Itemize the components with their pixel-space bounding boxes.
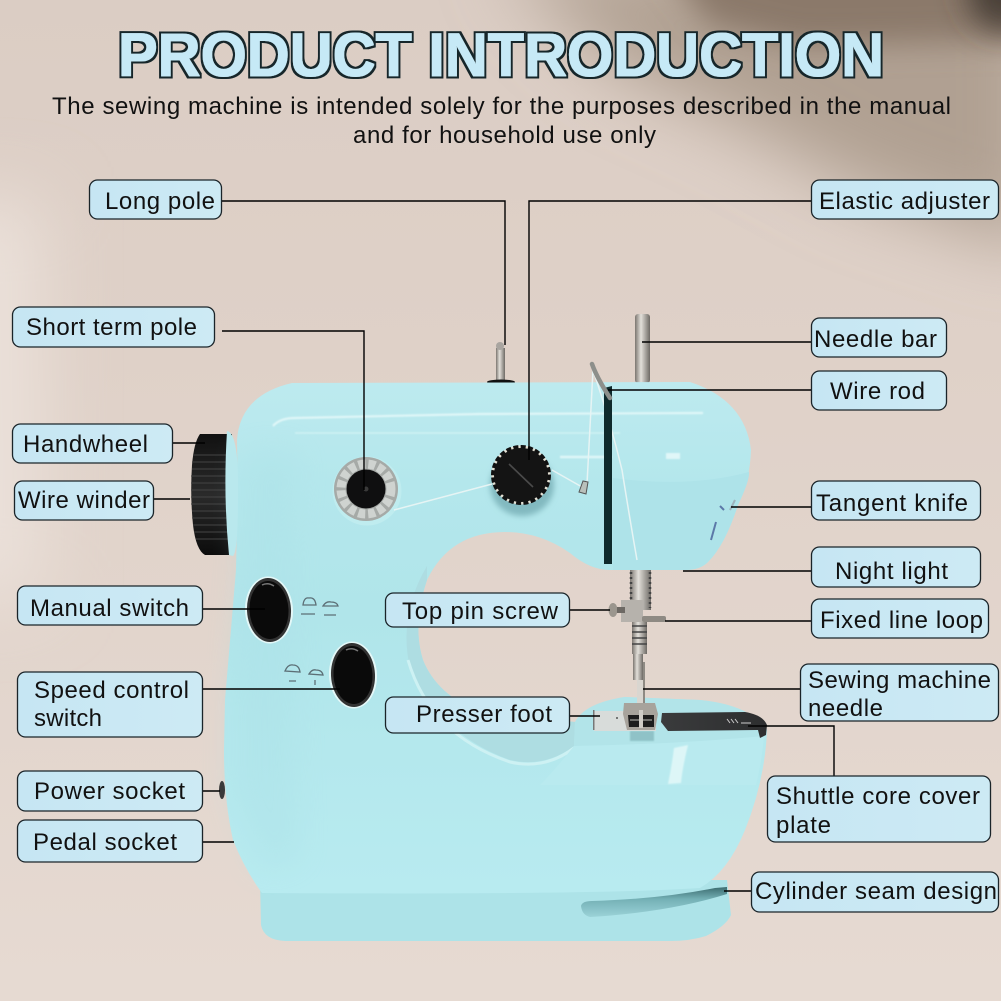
title: PRODUCT INTRODUCTION xyxy=(118,21,884,89)
subtitle: The sewing machine is intended solely for the purposes described in the manual xyxy=(52,93,951,120)
label: Night light xyxy=(812,547,980,587)
head lower shading xyxy=(613,472,749,570)
cylinder seam slot xyxy=(581,887,727,917)
subtitle: and for household use only xyxy=(353,122,656,149)
sewing machine xyxy=(191,314,767,941)
bed front facet xyxy=(540,736,764,785)
icon: handwheel xyxy=(191,434,232,555)
label: Speed control switch: switch xyxy=(34,705,102,732)
wire rod hook xyxy=(592,364,610,398)
power socket xyxy=(219,781,225,799)
bed highlight xyxy=(668,745,688,784)
label: Top pin screw: Top pin screw xyxy=(402,598,559,625)
winder dial xyxy=(332,456,402,526)
label: Power socket: Power socket xyxy=(34,778,185,805)
machine base xyxy=(260,880,731,941)
needle plate xyxy=(593,710,656,731)
icon: needle bar pole xyxy=(635,314,650,383)
label: Shuttle core cover plate xyxy=(768,776,990,842)
label: Top pin screw xyxy=(386,593,570,627)
label: Needle bar xyxy=(812,318,946,357)
label: Night light: Night light xyxy=(835,558,948,585)
needle assembly xyxy=(608,570,666,704)
label: Manual switch: Manual switch xyxy=(30,595,189,622)
label: Wire winder xyxy=(14,481,154,520)
label: Power socket xyxy=(18,771,202,811)
threads xyxy=(394,370,637,560)
label: Sewing machine needle: needle xyxy=(808,695,883,722)
speed switch xyxy=(327,640,379,710)
label: Pedal socket xyxy=(18,820,202,862)
label: Elastic adjuster: Elastic adjuster xyxy=(819,188,990,215)
label: Elastic adjuster xyxy=(812,180,998,219)
leader lines xyxy=(154,201,834,891)
label: Fixed line loop xyxy=(812,599,988,638)
switch icons xyxy=(285,598,338,685)
body left shading xyxy=(234,450,300,870)
tension knob xyxy=(490,446,554,516)
arch inner wall xyxy=(406,566,575,762)
label: Wire winder: Wire winder xyxy=(18,487,150,514)
label: Needle bar: Needle bar xyxy=(814,326,937,353)
label: Speed control switch xyxy=(18,672,202,737)
label: Short term pole: Short term pole xyxy=(26,314,197,341)
label: Presser foot: Presser foot xyxy=(416,701,552,728)
machine highlights xyxy=(273,413,703,457)
machine body xyxy=(224,382,767,893)
label: Shuttle core cover plate: Shuttle core cover xyxy=(776,783,980,810)
label: Long pole xyxy=(90,180,222,219)
label: Cylinder seam design: Cylinder seam design xyxy=(755,878,997,905)
label: Sewing machine needle: Sewing machine xyxy=(808,667,991,694)
thread guide xyxy=(579,481,588,494)
label: Short term pole xyxy=(12,307,214,347)
label: Wire rod xyxy=(812,371,946,410)
label: Fixed line loop: Fixed line loop xyxy=(820,607,983,634)
bed top surface xyxy=(574,697,767,746)
manual switch xyxy=(243,575,295,645)
label: Presser foot xyxy=(386,697,570,733)
label: Tangent knife xyxy=(812,481,980,520)
handwheel flange xyxy=(225,431,238,556)
subtitle xyxy=(52,93,951,149)
label: Tangent knife: Tangent knife xyxy=(816,490,968,517)
label: Pedal socket: Pedal socket xyxy=(33,829,177,856)
label: Wire rod: Wire rod xyxy=(830,378,925,405)
label: Handwheel xyxy=(12,424,172,463)
label: Manual switch xyxy=(18,586,202,625)
knife marks xyxy=(711,500,735,540)
label: Cylinder seam design xyxy=(752,872,998,912)
presser foot xyxy=(623,703,658,730)
icon: short spool pin xyxy=(487,342,515,384)
label: Sewing machine needle xyxy=(800,664,998,722)
label: Long pole: Long pole xyxy=(105,188,215,215)
label: Shuttle core cover plate: plate xyxy=(776,812,831,839)
label: Handwheel: Handwheel xyxy=(23,431,148,458)
thread slit xyxy=(604,386,612,564)
arch lip highlight xyxy=(408,660,574,764)
shuttle cover plate xyxy=(661,712,767,738)
foot shadow xyxy=(630,731,654,741)
label: Speed control switch: Speed control xyxy=(34,677,189,704)
